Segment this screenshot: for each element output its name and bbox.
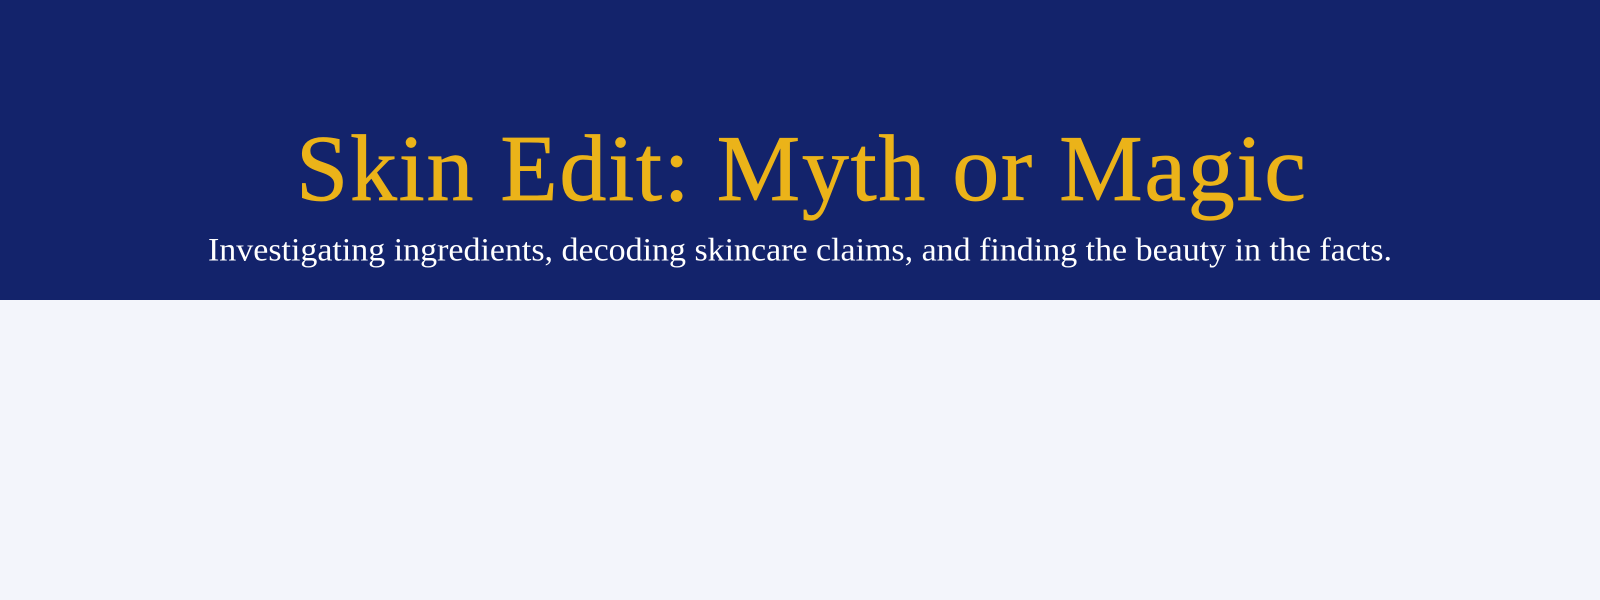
header band [0, 0, 1600, 300]
title: Skin Edit: Myth or Magic [296, 117, 1306, 221]
subtitle: Investigating ingredients, decoding skincare claims, and finding the beauty in the facts. [208, 232, 1392, 268]
